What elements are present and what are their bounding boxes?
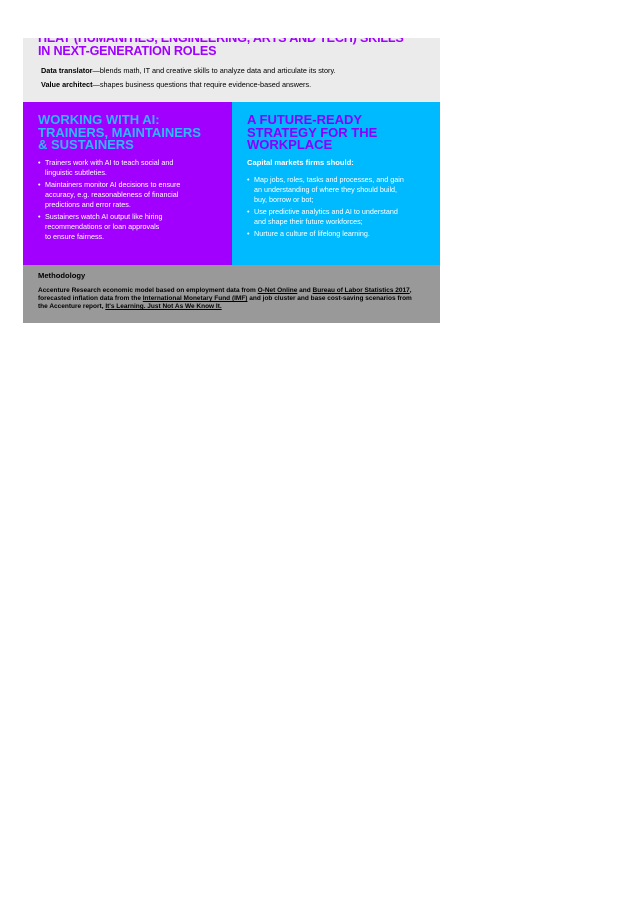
bullets: actions: and shape their future workforces; [254,217,363,226]
bullets: actions: Map jobs, roles, tasks and processes, and gain [254,175,404,184]
heading: strategy [247,112,377,152]
heading: working with AI: & SUSTAINERS [38,137,134,152]
bullets: actions: Nurture a culture of lifelong learning. [254,229,370,238]
heading: working with AI [38,112,201,152]
bullets: roles: Maintainers monitor AI decisions to ensure [45,180,180,189]
heading: working with AI: TRAINERS, MAINTAINERS [38,124,201,140]
text: roles: Data translator—blends math, IT and creative skills to analyze data and articulate its story. [41,66,336,75]
bullets: roles: Trainers work with AI to teach social and [45,158,173,167]
heading: methodology: Methodology [38,271,85,280]
heading: strategy: STRATEGY FOR THE [247,124,377,140]
heading: working with AI: WORKING WITH AI: [38,112,160,127]
panel: future-ready strategy [232,102,440,265]
bullets: roles: accuracy, e.g. reasonableness of financial [45,190,178,199]
panel: methodology [23,265,440,323]
heading: strategy: A FUTURE-READY [247,112,362,127]
heading: skills: IN NEXT-GENERATION ROLES [38,44,216,58]
text: methodology [38,287,412,310]
bullets: actions: buy, borrow or bot; [254,195,313,204]
bullets: roles: predictions and error rates. [45,200,131,209]
subheading: Capital markets firms should: [247,158,354,167]
bullets: roles: recommendations or loan approvals [45,222,159,231]
bullets: actions [247,175,404,238]
bullets: actions: Use predictive analytics and AI to understand [254,207,398,216]
text: roles: Value architect—shapes business questions that require evidence-based answers. [41,80,311,89]
heading: strategy: WORKPLACE [247,137,332,152]
panel: top skills [23,38,440,102]
bullets: roles: to ensure fairness. [45,232,104,241]
text: methodology: forecasted inflation data from the International Monetary Fund (IMF) and job cluster and base cost-saving scenarios from [38,295,412,302]
bullets: roles: Sustainers watch AI output like hiring [45,212,162,221]
text: methodology: the Accenture report, It's Learning. Just Not As We Know It. [38,303,222,310]
text: methodology: Accenture Research economic model based on employment data from O-Net Online and Bureau of Labor Statistics 2017, [38,287,412,294]
bullets: roles: linguistic subtleties. [45,168,107,177]
heading: skills [38,38,404,58]
bullets: roles [38,158,180,241]
bullets: actions: an understanding of where they should build, [254,185,397,194]
text: roles [41,66,336,89]
panel: working with AI [23,102,232,265]
